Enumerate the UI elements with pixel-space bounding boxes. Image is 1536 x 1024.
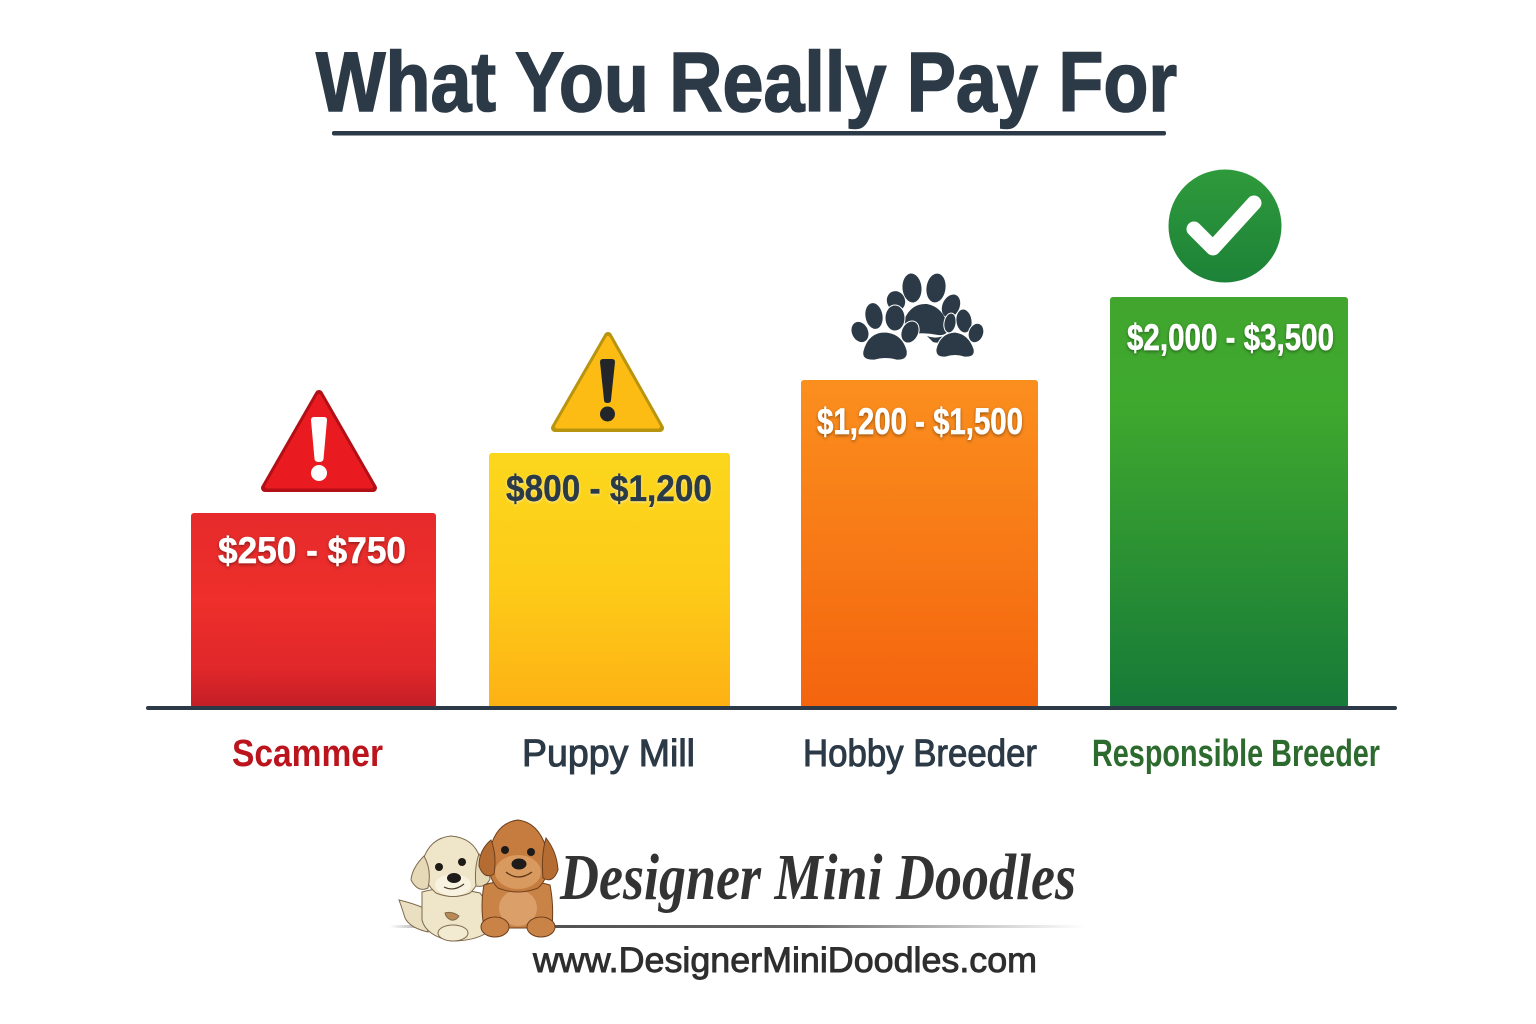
logo script text: Designer Mini Doodles [559,841,1076,914]
icon: paw prints [848,272,986,360]
bar: scammer [191,513,436,708]
title: What You Really Pay For [316,35,1177,129]
website url: www.DesignerMiniDoodles.com [532,941,1037,980]
category labels [232,733,1380,775]
icon: brown puppy [479,820,558,937]
icon: green check circle [1168,170,1282,282]
bar: scammer: $250 - $750 [218,530,406,571]
bar: puppy mill: $800 - $1,200 [506,468,712,509]
left paw [848,301,923,360]
right paw [936,308,986,357]
label: hobby breeder: Hobby Breeder [803,733,1037,775]
baseline axis [146,706,1397,710]
logo rule [390,925,1085,928]
bar: responsible breeder [1110,297,1348,708]
icon: cream puppy [399,836,490,941]
title underline [332,131,1166,136]
logo: designer mini doodles [390,820,1085,980]
label: scammer: Scammer [232,733,383,775]
icon: red warning triangle [265,394,373,488]
bar: responsible breeder: $2,000 - $3,500 [1127,317,1334,358]
bar: hobby breeder: $1,200 - $1,500 [817,401,1023,442]
bar: puppy mill [489,453,730,708]
label: puppy mill: Puppy Mill [522,733,695,775]
icon: yellow warning triangle [555,336,660,428]
bar: hobby breeder [801,380,1038,708]
centre paw [884,272,964,343]
label: responsible breeder: Responsible Breeder [1092,733,1380,775]
bar chart [146,297,1397,710]
